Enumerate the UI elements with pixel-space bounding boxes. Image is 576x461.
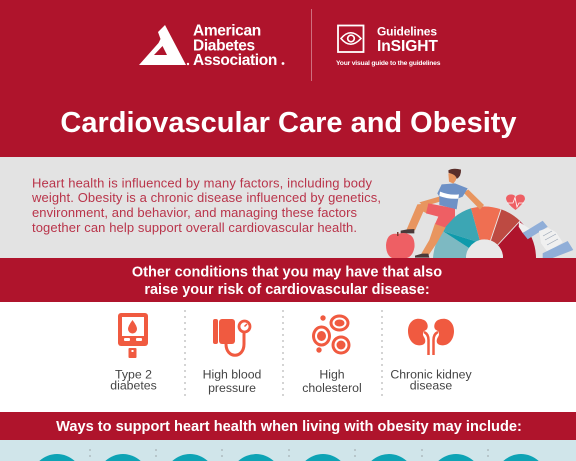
intro text: Heart health is influenced by many factors, including body <box>32 176 372 190</box>
apple <box>386 232 415 258</box>
condition: type 2 diabetes: diabetes <box>110 378 157 392</box>
logo: American Diabetes Association: Diabetes <box>193 38 255 54</box>
logo divider <box>311 9 312 81</box>
icon: heart with pulse <box>506 194 525 210</box>
condition: high blood pressure <box>203 319 262 395</box>
header band <box>0 0 576 157</box>
logo: Guidelines InSIGHT: Your visual guide to the guidelines <box>336 60 441 67</box>
condition: high cholesterol <box>302 314 362 395</box>
condition: chronic kidney disease: Chronic kidney <box>390 368 473 382</box>
condition: type 2 diabetes: Type 2 <box>115 368 152 382</box>
measuring tape <box>519 221 573 258</box>
band: other conditions <box>0 258 576 302</box>
logo: Guidelines InSIGHT: InSIGHT <box>377 38 438 55</box>
condition: high blood pressure: pressure <box>208 381 256 395</box>
column dividers <box>185 310 382 398</box>
intro text: together can help support overall cardiovascular health. <box>32 220 357 235</box>
illustration: person on gauge <box>386 169 573 258</box>
ways dividers <box>90 449 488 461</box>
ways panel <box>0 440 576 461</box>
intro panel <box>0 157 576 258</box>
icon: kidneys <box>408 319 454 355</box>
condition: chronic kidney disease <box>390 319 473 392</box>
band: other conditions: raise your risk of cardiovascular disease: <box>144 282 430 298</box>
band: other conditions: Other conditions that you may have that also <box>132 264 442 280</box>
icon: cholesterol cells <box>312 314 350 354</box>
logo: Guidelines InSIGHT <box>336 24 441 67</box>
intro text <box>31 176 381 235</box>
logo: American Diabetes Association <box>139 22 284 69</box>
logo: American Diabetes Association: Association <box>193 52 277 69</box>
person <box>401 169 484 258</box>
logo: Guidelines InSIGHT: Guidelines <box>377 24 437 38</box>
condition: type 2 diabetes <box>110 313 157 392</box>
row of teal circles <box>39 454 539 461</box>
icon: glucose meter <box>118 313 148 358</box>
band: ways to support heart health: Ways to support heart health when living with obesity may include: <box>56 419 522 435</box>
title: Cardiovascular Care and Obesity <box>60 107 517 139</box>
icon: eye in frame <box>338 26 364 52</box>
condition: high blood pressure: High blood <box>203 368 262 382</box>
icon: blood pressure cuff <box>213 319 250 355</box>
intro text: environment, and behavior, and managing these factors <box>32 205 358 220</box>
condition: chronic kidney disease: disease <box>410 378 452 392</box>
band: ways to support heart health <box>0 412 576 440</box>
gauge <box>433 207 536 258</box>
condition: high cholesterol: cholesterol <box>302 381 362 395</box>
logo: American Diabetes Association: American <box>193 22 261 40</box>
condition: high cholesterol: High <box>319 368 345 382</box>
intro text: weight. Obesity is a chronic disease influenced by genetics, <box>31 190 381 205</box>
